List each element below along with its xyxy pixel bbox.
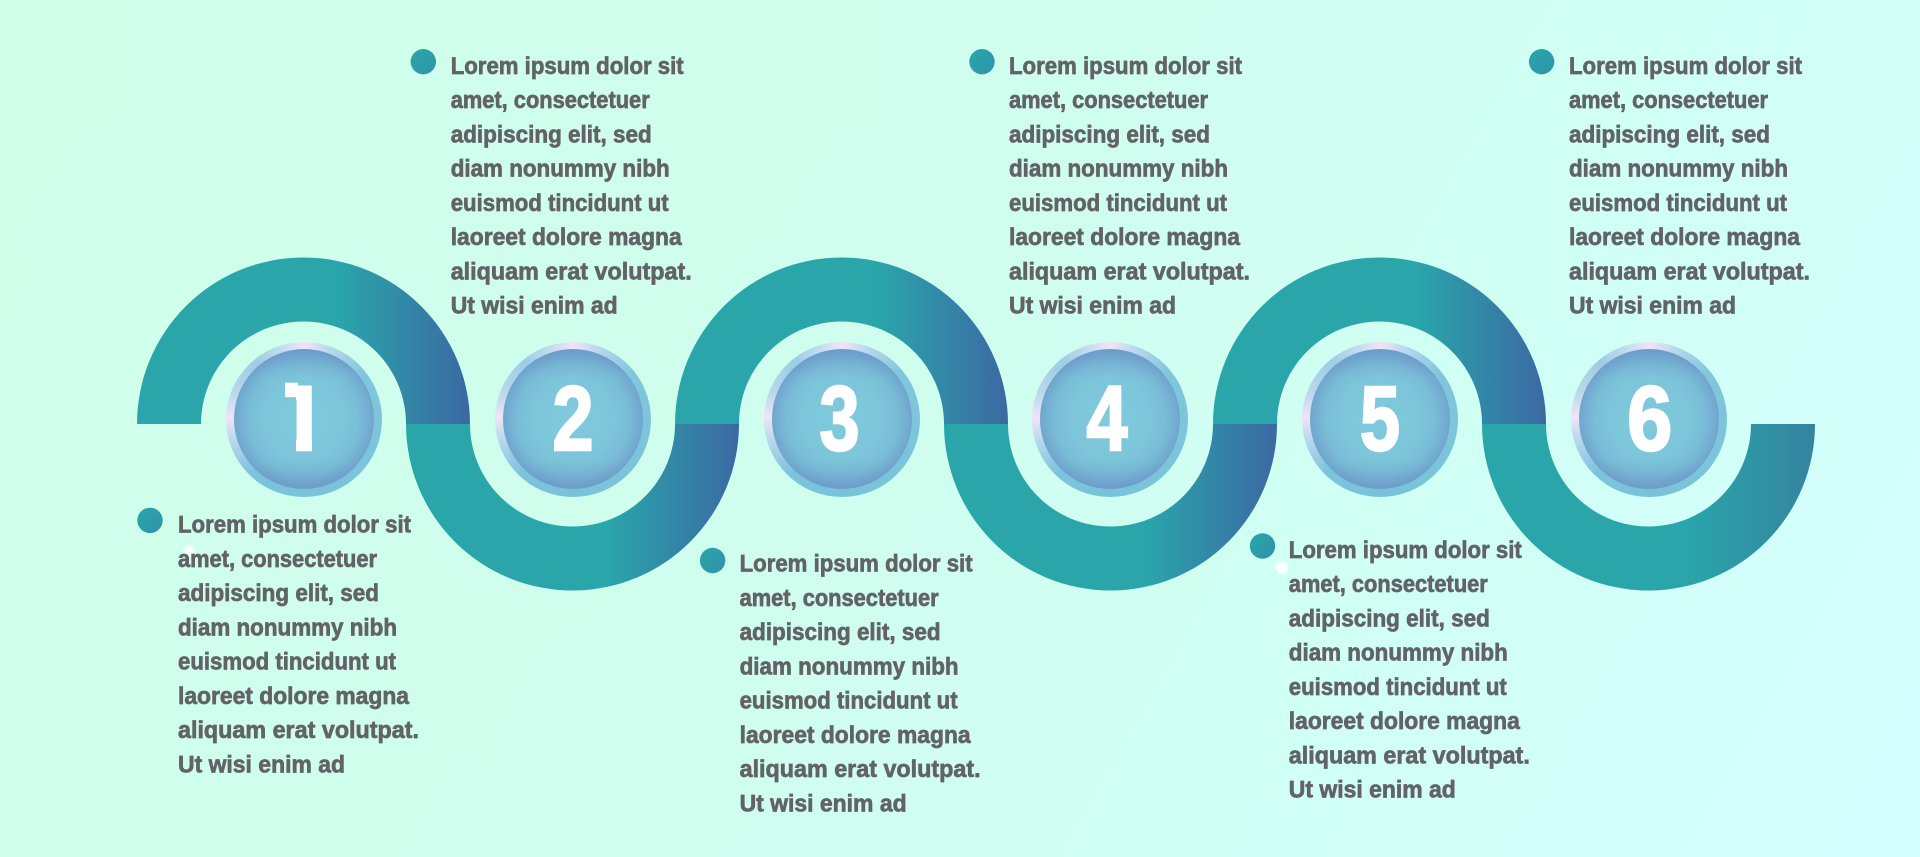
sparkle near text block 5: [1276, 561, 1288, 574]
text block 3: euismod tincidunt ut: [740, 688, 958, 714]
badge 3: [764, 342, 920, 497]
text block 3: laoreet dolore magna: [740, 722, 971, 749]
text block 4: diam nonummy nibh: [1009, 156, 1228, 183]
text block 1: euismod tincidunt ut: [178, 649, 396, 676]
bullet 3: [700, 548, 725, 573]
text block 1: [137, 508, 419, 778]
text block 6: diam nonummy nibh: [1569, 156, 1788, 183]
ribbon segment 6: [1482, 424, 1815, 590]
text block 3: diam nonummy nibh: [740, 653, 959, 680]
text block 5: aliquam erat volutpat.: [1289, 742, 1530, 769]
badge 3: 3: [820, 368, 860, 470]
text block 4: adipiscing elit, sed: [1009, 121, 1210, 148]
text block 5: euismod tincidunt ut: [1289, 674, 1507, 701]
badge 2: [495, 342, 651, 497]
text block 6: aliquam erat volutpat.: [1569, 258, 1810, 285]
text block 2: amet, consectetuer: [451, 87, 650, 114]
badge 6: 6: [1627, 368, 1672, 470]
sparkle near text block 1: [183, 545, 195, 557]
text block 5: Ut wisi enim ad: [1289, 777, 1456, 804]
text block 2: Lorem ipsum dolor sit: [451, 53, 684, 80]
text block 3: adipiscing elit, sed: [740, 619, 941, 646]
text block 1: adipiscing elit, sed: [178, 580, 379, 607]
text block 2: laoreet dolore magna: [451, 224, 682, 251]
text block 6: amet, consectetuer: [1569, 87, 1768, 114]
text block 1: Ut wisi enim ad: [178, 751, 345, 778]
text block 2: [411, 49, 692, 320]
text block 5: laoreet dolore magna: [1289, 708, 1520, 735]
badge 1: 1: [276, 368, 328, 470]
text block 4: [969, 49, 1250, 320]
text block 3: Lorem ipsum dolor sit: [740, 550, 973, 578]
badge 2: 2: [552, 368, 594, 470]
ribbon segment 4: [944, 424, 1277, 590]
badge 1: [226, 342, 382, 497]
ribbon segment 2: [406, 424, 739, 590]
text block 1: laoreet dolore magna: [178, 683, 409, 710]
text block 3: amet, consectetuer: [740, 585, 939, 612]
bullet 6: [1529, 49, 1554, 74]
text block 4: aliquam erat volutpat.: [1009, 258, 1250, 285]
ribbon segment 5: [1213, 258, 1546, 424]
text block 4: Ut wisi enim ad: [1009, 293, 1176, 320]
text block 4: euismod tincidunt ut: [1009, 190, 1227, 217]
text block 2: adipiscing elit, sed: [451, 121, 652, 148]
text block 3: aliquam erat volutpat.: [740, 756, 981, 783]
text block 5: [1250, 533, 1530, 804]
text block 3: [700, 548, 981, 817]
bullet 5: [1250, 533, 1275, 559]
text block 6: Lorem ipsum dolor sit: [1569, 53, 1802, 80]
bullet 4: [969, 49, 995, 74]
text block 5: diam nonummy nibh: [1289, 640, 1508, 667]
bullet 1: [137, 508, 163, 533]
text block 1: diam nonummy nibh: [178, 614, 397, 641]
badge 6: [1571, 342, 1727, 497]
text block 6: Ut wisi enim ad: [1569, 293, 1736, 320]
text block 2: aliquam erat volutpat.: [451, 258, 692, 285]
ribbon segment 1: [137, 258, 470, 424]
text block 2: euismod tincidunt ut: [451, 190, 669, 217]
text block 5: amet, consectetuer: [1289, 571, 1488, 598]
badge 5: [1302, 342, 1458, 497]
text block 1: Lorem ipsum dolor sit: [178, 512, 411, 539]
text block 4: amet, consectetuer: [1009, 87, 1208, 114]
badge 5: 5: [1360, 368, 1400, 470]
text block 2: diam nonummy nibh: [451, 156, 670, 183]
badge 4: 4: [1086, 368, 1128, 470]
bullet 2: [411, 49, 436, 74]
text block 2: Ut wisi enim ad: [451, 293, 618, 320]
badge 4: [1032, 342, 1188, 497]
text block 1: amet, consectetuer: [178, 546, 377, 573]
text block 6: [1529, 49, 1810, 320]
text block 6: laoreet dolore magna: [1569, 224, 1800, 251]
text block 3: Ut wisi enim ad: [740, 790, 907, 817]
text block 4: Lorem ipsum dolor sit: [1009, 53, 1242, 80]
text block 6: adipiscing elit, sed: [1569, 121, 1770, 148]
text block 4: laoreet dolore magna: [1009, 224, 1240, 251]
text block 5: adipiscing elit, sed: [1289, 605, 1490, 632]
text block 1: aliquam erat volutpat.: [178, 717, 419, 744]
ribbon segment 3: [675, 258, 1008, 424]
text block 6: euismod tincidunt ut: [1569, 190, 1787, 217]
text block 5: Lorem ipsum dolor sit: [1289, 537, 1522, 564]
